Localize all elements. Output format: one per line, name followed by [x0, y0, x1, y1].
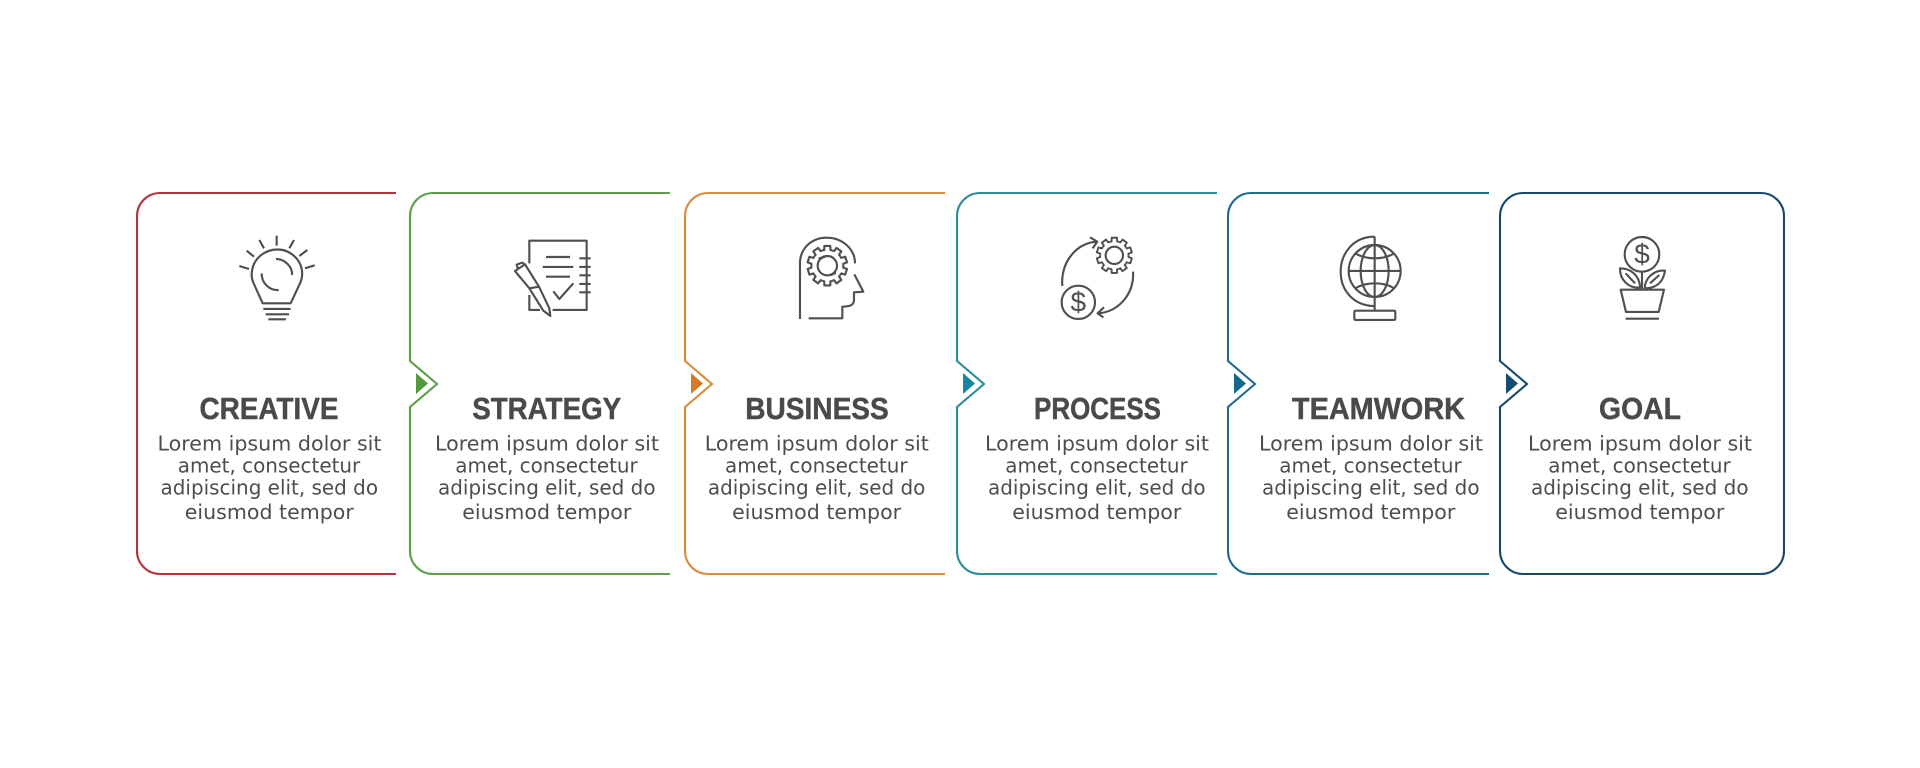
text block: strategy: eiusmod tempor: [462, 500, 632, 524]
arrow: business: [691, 373, 703, 394]
text block: process: amet, consectetur: [1005, 454, 1189, 478]
icon: globe: [1341, 237, 1401, 320]
text block: goal: amet, consectetur: [1548, 454, 1732, 478]
text block: teamwork: amet, consectetur: [1279, 454, 1463, 478]
text block: strategy: [435, 432, 659, 524]
text block: business: Lorem ipsum dolor sit: [705, 432, 929, 456]
heading: strategy: STRATEGY: [472, 391, 621, 426]
text block: strategy: amet, consectetur: [455, 454, 639, 478]
text block: strategy: adipiscing elit, sed do: [438, 476, 656, 500]
arrow: strategy: [416, 373, 428, 394]
arrow: teamwork: [1234, 373, 1246, 394]
card outline: process: [957, 193, 1217, 574]
text block: creative: adipiscing elit, sed do: [161, 476, 378, 500]
text block: business: amet, consectetur: [725, 454, 908, 478]
card outline: business: [685, 193, 945, 574]
card outline: goal: [1500, 193, 1784, 574]
panel: teamwork: [1228, 193, 1489, 574]
heading: process: PROCESS: [1034, 391, 1161, 426]
icon: money plant: [1620, 237, 1665, 319]
card outline: creative: [137, 193, 396, 574]
arrow: goal: [1506, 373, 1518, 394]
card outline: teamwork: [1228, 193, 1489, 574]
card outline: strategy: [410, 193, 670, 574]
text block: goal: adipiscing elit, sed do: [1531, 476, 1749, 500]
arrow: process: [963, 373, 975, 394]
text block: process: [985, 432, 1209, 524]
text block: creative: amet, consectetur: [178, 454, 361, 478]
text block: teamwork: [1259, 432, 1483, 524]
text block: goal: Lorem ipsum dolor sit: [1528, 432, 1752, 456]
heading: creative: CREATIVE: [200, 391, 338, 426]
icon: money plant: $: [1634, 239, 1650, 270]
panel: creative: [137, 193, 396, 574]
text block: teamwork: eiusmod tempor: [1286, 500, 1456, 524]
icon: gear and dollar cycle: [1062, 237, 1133, 319]
icon: gear and dollar cycle: $: [1071, 287, 1087, 318]
icon: light bulb: [239, 236, 315, 319]
text block: strategy: Lorem ipsum dolor sit: [435, 432, 659, 456]
text block: creative: [158, 432, 382, 524]
heading: teamwork: TEAMWORK: [1292, 391, 1466, 426]
icon: head with gear: [800, 238, 863, 319]
text block: teamwork: Lorem ipsum dolor sit: [1259, 432, 1483, 456]
panel: goal: [1500, 193, 1784, 574]
text block: business: eiusmod tempor: [732, 500, 902, 524]
heading: goal: GOAL: [1599, 391, 1681, 426]
panel: process: [957, 193, 1217, 574]
text block: business: [705, 432, 929, 524]
text block: business: adipiscing elit, sed do: [708, 476, 925, 500]
text block: teamwork: adipiscing elit, sed do: [1262, 476, 1480, 500]
text block: goal: [1528, 432, 1752, 524]
text block: goal: eiusmod tempor: [1555, 500, 1725, 524]
panel: business: [685, 193, 945, 574]
text block: creative: eiusmod tempor: [185, 500, 355, 524]
text block: process: adipiscing elit, sed do: [988, 476, 1206, 500]
text block: process: eiusmod tempor: [1012, 500, 1182, 524]
heading: business: BUSINESS: [745, 391, 889, 426]
text block: process: Lorem ipsum dolor sit: [985, 432, 1209, 456]
icon: notebook and pen: [515, 241, 591, 316]
text block: creative: Lorem ipsum dolor sit: [158, 432, 382, 456]
panel: strategy: [410, 193, 670, 574]
